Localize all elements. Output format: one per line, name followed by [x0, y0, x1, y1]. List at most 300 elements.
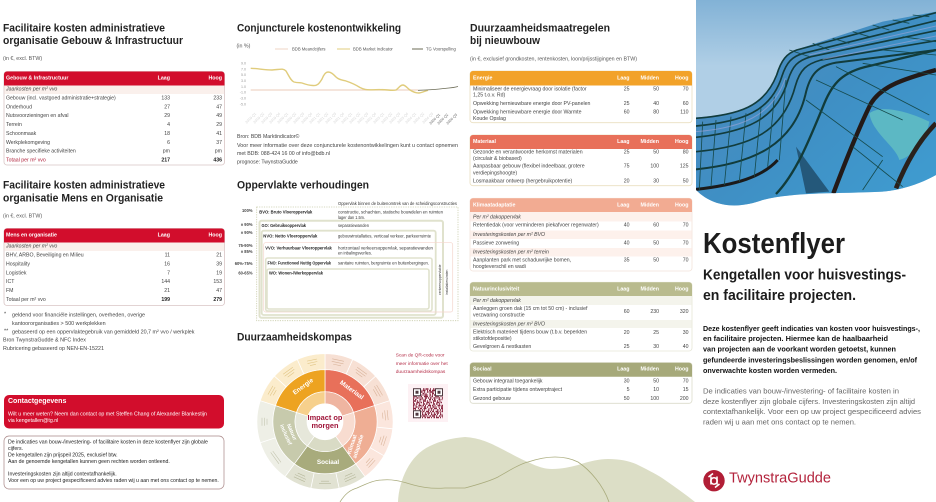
table header: Hoog [675, 202, 688, 208]
table: Klimaatadaptatie: 70 [683, 223, 689, 229]
intro text: onverwachte kosten worden vermeden. [703, 366, 837, 375]
table: Mens en organisatie: 11 [165, 252, 170, 258]
table header: Laag [617, 139, 630, 145]
heading: facility costs people: organisatie Mens en Organisatie [3, 192, 163, 204]
table: Materiaal: 125 [680, 164, 689, 170]
table: Gebouw & Infrastructuur: Jaarkosten per m² vvo [5, 87, 57, 93]
table header: Laag [158, 76, 170, 82]
percentages: 60-65% [238, 270, 253, 276]
table header: Mens en organisatie [6, 232, 57, 238]
table: Energie: Opwekking hernieuwbare energie door Warmte [473, 110, 582, 116]
table: Gebouw & Infrastructuur: Werkplekomgeving [6, 140, 50, 146]
unit note: (in €, exclusief grondkosten, rentenkosten, loon/prijsstijgingen en BTW) [470, 56, 637, 62]
heading: facility costs building [3, 22, 183, 47]
table: Energie: Opwekking hernieuwbare energie door PV-panelen [473, 101, 590, 107]
compass centre text: morgen [311, 421, 339, 430]
table: Sociaal [470, 363, 692, 403]
table: Energie: 110 [680, 110, 689, 116]
table: Mens en organisatie: 19 [216, 270, 222, 276]
vertical labels: installatieruimten [445, 269, 449, 295]
table: Gebouw & Infrastructuur [4, 72, 224, 165]
table: Klimaatadaptatie: 50 [653, 240, 659, 246]
table: Sociaal: Gebouw integraal toegankelijk [473, 378, 543, 384]
explanatory text: contextafhankelijk. Voor een op uw project gespecificeerd advies [703, 407, 921, 416]
table: Materiaal: (circulair & biobased) [473, 156, 522, 162]
footnotes: ** [4, 328, 9, 334]
heading: sustainability measures [470, 22, 610, 47]
table: Natuurinclusiviteit: verzwaring constructie [473, 312, 525, 318]
table: Sociaal: Gezond gebouw [473, 396, 511, 402]
area descriptions: Oppervlak binnen de buitenomtrek van de scheidingsconstructies [338, 201, 457, 206]
y axis: 9.0 [241, 62, 246, 66]
logo: TwynstraGudde [703, 470, 831, 491]
table header: Laag [617, 75, 630, 81]
x axis labels: 2019 Q3 [261, 112, 273, 124]
segment labels: Energie [292, 377, 315, 396]
series: BDB Meandcijfers [251, 89, 418, 91]
table: Klimaatadaptatie: 50 [653, 258, 659, 264]
decorative green background shape [398, 437, 695, 502]
panel: disclaimer: cijfers. [8, 446, 23, 452]
table header: Laag [617, 367, 630, 373]
percentages: ± 90% [241, 222, 253, 227]
table: Gebouw & Infrastructuur: Totaal per m² vvo [6, 158, 46, 164]
x axis labels: 2022 Q2 [349, 112, 361, 124]
table: Materiaal: Losmaakbaar ontwerp (hergebruikpotentie) [473, 179, 572, 185]
x axis labels: 2020 Q1 [277, 112, 289, 124]
table header [470, 71, 692, 86]
table header: Hoog [675, 286, 688, 292]
segment labels: inclusief [278, 424, 293, 446]
percentages: ± 85% [241, 249, 253, 254]
table: Klimaatadaptatie: Retentiedak (voor verminderen piekafvoer regenwater) [473, 223, 599, 229]
area descriptions: separatiewanden [338, 223, 370, 228]
x axis labels: 2026 Q3 [446, 113, 458, 125]
compass centre text [308, 413, 343, 430]
table: Natuurinclusiviteit: 40 [683, 344, 689, 350]
y axis: 5.0 [241, 73, 246, 77]
y axis: -3.0 [240, 96, 246, 100]
table: Natuurinclusiviteit [470, 282, 692, 351]
contact heading: Contactgegevens [8, 398, 66, 405]
area labels: VVO: Verhuurbaar Vloeroppervlak [265, 246, 332, 250]
table: Energie: 70 [683, 86, 689, 92]
table: Natuurinclusiviteit: Investeringskosten per m² BVO [473, 321, 545, 327]
panel: disclaimer: Investeringskosten zijn altijd contextafhankelijk. [8, 471, 117, 477]
area descriptions: sanitaire ruimten, bergruimte en buitenbergingen. [338, 260, 429, 266]
table: Natuurinclusiviteit: 320 [680, 309, 689, 315]
table: Materiaal: 80 [683, 150, 689, 156]
table: Klimaatadaptatie: hoogteverschil en wadi [473, 264, 526, 270]
segment: Energie [260, 354, 325, 416]
heading: sustainability measures: bij nieuwbouw [470, 35, 541, 47]
table header: Natuurinclusiviteit [473, 286, 519, 292]
table header: Midden [640, 202, 659, 208]
segment labels: Natuur [285, 423, 298, 442]
area descriptions: en inbalingsverlies. [338, 250, 372, 256]
area labels: WO: Wonen-/Werkoppervlak [269, 270, 324, 276]
table: Mens en organisatie: 199 [161, 297, 170, 303]
table: Materiaal: Aanpasbaar gebouw (flexibel indeelbaar, grotere [473, 164, 585, 170]
table: Gebouw & Infrastructuur: Gebouw (incl. vastgoed administratie+strategie) [6, 96, 116, 102]
table header: Sociaal [473, 367, 492, 373]
table: Mens en organisatie: Hospitality [6, 262, 30, 268]
table header [470, 363, 692, 377]
chart source text: prognose: TwynstraGudde [237, 160, 298, 166]
table: Mens en organisatie: 47 [216, 288, 222, 294]
table: Gebouw & Infrastructuur: 29 [216, 122, 222, 128]
x axis labels: 2026 Q2 [437, 113, 449, 125]
area labels [259, 210, 332, 276]
x axis labels: 2023 Q2 [381, 112, 393, 124]
main title: Kostenflyer [703, 228, 845, 260]
diagram: floor area ratios [235, 201, 458, 321]
segment labels: Materiaal [338, 379, 365, 401]
table header: Laag [617, 202, 630, 208]
x axis labels: 2019 Q4 [269, 112, 281, 124]
percentages: 60%-75% [235, 261, 253, 266]
line chart: cost development [240, 46, 458, 125]
table header: Hoog [675, 75, 688, 81]
footnotes: gebaseerd op een oppervlaktegebruik van gemiddeld 20,7 m² vvo / werkplek [12, 329, 195, 335]
segment labels [278, 377, 366, 466]
x axis labels: 2020 Q3 [293, 112, 305, 124]
table header: Materiaal [473, 139, 496, 145]
footnotes: kantoororganisaties > 500 werkplekken [12, 321, 106, 327]
area descriptions: horizontaal verkeersoppervlak, separatiewanden [338, 246, 434, 250]
x axis labels: 2023 Q1 [373, 112, 385, 124]
QR caption: meer informatie over het [396, 361, 448, 367]
chart source text: Bron: BDB Marktindicator© [237, 133, 300, 140]
table: Gebouw & Infrastructuur: Branche specifieke activiteiten [6, 149, 76, 155]
segment: Natuurinclusiviteit [257, 401, 314, 477]
table: Mens en organisatie: 16 [164, 262, 170, 268]
area descriptions: gebouwinstallaties, verticaal verkeer, parkeerruimte [338, 234, 432, 238]
x axis labels: 2023 Q3 [389, 112, 401, 124]
table: Gebouw & Infrastructuur: 436 [213, 158, 222, 164]
explanatory text: De indicaties van bouw-/investering- of facilitaire kosten in [703, 386, 899, 396]
panel: contact details [4, 395, 224, 428]
table: Gebouw & Infrastructuur: pm [215, 149, 222, 155]
intro text: en facilitaire projecten. Hiermee kan de haalbaarheid [703, 334, 888, 343]
table header: Midden [640, 286, 659, 292]
table: Gebouw & Infrastructuur: 47 [216, 104, 222, 110]
segment: Sociaal [285, 436, 365, 490]
logo wordmark: TwynstraGudde [729, 471, 831, 487]
chart source text [237, 133, 458, 166]
table: Klimaatadaptatie: 40 [624, 240, 630, 246]
panel: disclaimer: De kengetallen zijn prijspeil 2025, exclusief btw. [8, 452, 118, 458]
table: Energie: 60 [624, 110, 630, 116]
table header: Hoog [675, 139, 688, 145]
subtitle: en facilitaire projecten. [703, 287, 856, 304]
chart: sustainability compass wheel [257, 354, 393, 490]
table: Gebouw & Infrastructuur: Nutsvoorzieningen en afval [6, 113, 69, 119]
table: Natuurinclusiviteit: Gevelgroen & nestkasten [473, 344, 531, 350]
area descriptions: constructie, schachten, statische bouwdelen en ruimten [338, 210, 444, 214]
heading: facility costs people: Facilitaire kosten administratieve [3, 180, 165, 192]
unit note: (in %) [236, 44, 251, 50]
heading: facility costs people [3, 180, 165, 204]
contact text [8, 412, 207, 424]
chart legend: BDB Meandcijfers [292, 46, 326, 52]
table header: Midden [640, 75, 659, 81]
table header [4, 72, 224, 86]
explanatory text: raden wij u aan met ons contact op te nemen. [703, 418, 856, 426]
table header: Midden [640, 367, 659, 373]
photo: curved glass building facade [696, 0, 936, 206]
table: Klimaatadaptatie: 40 [624, 223, 630, 229]
panel: disclaimer: De indicaties van bouw-/investering- of facilitaire kosten in deze kostenflyer zijn globale [8, 439, 208, 445]
series: TG Voorspelling [418, 86, 458, 90]
table: Sociaal: 50 [624, 396, 630, 402]
footnotes: * [4, 312, 7, 318]
table: Mens en organisatie: ICT [6, 279, 15, 285]
heading: facility costs building: Facilitaire kosten administratieve [3, 22, 165, 34]
table: Energie [470, 71, 692, 123]
percentages: 75-90% [238, 243, 253, 248]
table header [470, 198, 692, 212]
table: Gebouw & Infrastructuur: 29 [164, 113, 170, 119]
table: Klimaatadaptatie: Per m² dakoppervlak [473, 214, 521, 220]
panel: disclaimer: Aan de genoemde kengetallen kunnen geen rechten worden ontleend. [8, 459, 170, 465]
series: BDB Market Indicator [251, 68, 428, 93]
table: Mens en organisatie: Totaal per m² vvo [6, 297, 46, 303]
table: Natuurinclusiviteit: 30 [683, 330, 689, 336]
table header [470, 135, 692, 149]
area descriptions: lager dan 1.5m. [338, 215, 365, 220]
table: Mens en organisatie: 21 [164, 288, 170, 294]
subtitle: Kengetallen voor huisvestings- [703, 266, 906, 284]
table header: Hoog [208, 232, 222, 238]
x axis labels: 2024 Q2 [413, 112, 425, 124]
x axis labels: 2022 Q4 [365, 112, 377, 124]
table: Sociaal: 30 [624, 378, 630, 384]
table: Mens en organisatie: 144 [161, 279, 170, 285]
table: Gebouw & Infrastructuur: Terrein [6, 122, 22, 128]
x axis labels: 2021 Q4 [333, 112, 345, 124]
x axis labels: 2026 Q1 [429, 113, 441, 125]
table header: Klimaatadaptatie [473, 202, 515, 208]
table: Klimaatadaptatie: 60 [653, 223, 659, 229]
table: Materiaal: 20 [624, 179, 630, 185]
table: Energie: 25 [624, 101, 630, 107]
table: Materiaal: 30 [653, 179, 659, 185]
table: Natuurinclusiviteit: Per m² dakoppervlak [473, 298, 521, 304]
x axis labels: 2020 Q4 [301, 112, 313, 124]
chart legend [275, 46, 456, 52]
table: Sociaal: 70 [683, 378, 689, 384]
segment labels: Klimaat [347, 434, 359, 455]
QR caption: Scan de QR-code voor [396, 352, 445, 358]
footnotes: Rubricering gebaseerd op NEN-EN-15221 [3, 346, 104, 352]
table: Materiaal: 25 [624, 150, 630, 156]
table: Gebouw & Infrastructuur: 233 [213, 96, 222, 102]
table: Energie: 80 [653, 110, 659, 116]
heading: facility costs building: organisatie Gebouw & Infrastructuur [3, 35, 183, 47]
panel: disclaimer [4, 436, 224, 489]
table: Mens en organisatie [4, 228, 224, 306]
segment: Materiaal [325, 354, 390, 416]
percentages [235, 208, 253, 276]
contact text: via kengetallen@tg.nl [8, 418, 58, 424]
table header: Energie [473, 75, 492, 81]
table: Natuurinclusiviteit: stikstofdepositie) [473, 336, 512, 342]
segment labels: adaptatie [352, 434, 366, 459]
table: Mens en organisatie: BHV, ARBO, Beveiliging en Milieu [6, 252, 84, 258]
compass centre text: Impact op [308, 413, 343, 422]
footnotes: Bron TwynstraGudde & NFC Index [3, 338, 86, 344]
segment: Klimaatadaptatie [336, 401, 393, 477]
area labels: BVO: Bruto Vloeroppervlak [259, 210, 313, 214]
table: Sociaal: 5 [627, 387, 630, 393]
table: Gebouw & Infrastructuur: 27 [164, 104, 170, 110]
table: Gebouw & Infrastructuur: Onderhoud [6, 104, 32, 110]
table: Materiaal: 50 [683, 179, 689, 185]
explanatory text: deze kostenflyer zijn globale cijfers. Investeringskosten zijn altijd [703, 397, 915, 406]
logo mark [703, 470, 725, 491]
table: Energie: 50 [653, 86, 659, 92]
contact text: Wilt u meer weten? Neem dan contact op met Steffen Chang of Alexander Blankestijn [8, 412, 207, 418]
table: Gebouw & Infrastructuur: 133 [161, 96, 170, 102]
table: Natuurinclusiviteit: 60 [624, 309, 630, 315]
y axis: 3.0 [241, 79, 246, 83]
y axis: -5.0 [240, 102, 246, 106]
table: Energie: Koude Opslag [473, 116, 506, 122]
table: Energie: 60 [683, 101, 689, 107]
x axis labels: 2019 Q1 [245, 112, 257, 124]
table: Materiaal [470, 135, 692, 186]
table: Mens en organisatie: Logistiek [6, 270, 27, 276]
x axis labels: 2024 Q1 [405, 112, 417, 124]
table: Gebouw & Infrastructuur: 18 [164, 131, 170, 137]
table: Gebouw & Infrastructuur: 49 [216, 113, 222, 119]
table header: Midden [640, 139, 659, 145]
x axis labels [245, 112, 458, 125]
table: Sociaal: 15 [683, 387, 689, 393]
y axis [240, 62, 246, 106]
vertical labels [438, 264, 449, 295]
table: Klimaatadaptatie: Aanplanten park met schaduwrijke bomen, [473, 258, 571, 264]
table: Mens en organisatie: Jaarkosten per m² vvo [5, 244, 57, 250]
table header: Laag [617, 286, 630, 292]
chart legend: TG Voorspelling [426, 46, 456, 52]
intro text: gefundeerde investeringsbeslissingen worden genomen, en/of [703, 356, 918, 364]
x axis labels: 2021 Q1 [309, 112, 321, 124]
QR code [408, 384, 448, 422]
table: Mens en organisatie: FM [6, 288, 14, 294]
table header: Hoog [675, 367, 688, 373]
panel: disclaimer: Voor een op uw project gespecificeerd advies raden wij u aan met ons contact op te nemen. [8, 478, 219, 484]
table header: Gebouw & Infrastructuur [6, 76, 68, 82]
table: Klimaatadaptatie: 70 [683, 258, 689, 264]
area descriptions [338, 201, 457, 266]
x axis labels: 2023 Q4 [397, 112, 409, 124]
table: Natuurinclusiviteit: Aanleggen groen dak (15 cm tot 50 cm) - inclusief [473, 306, 588, 312]
table: Sociaal: 50 [653, 378, 659, 384]
area labels: GO: Gebruiksoppervlak [262, 223, 307, 228]
table: Natuurinclusiviteit: 25 [624, 344, 630, 350]
heading: floor area ratios: Oppervlakte verhoudingen [237, 180, 369, 192]
table: Materiaal: Gezonde en verantwoorde herkomst materialen [473, 150, 583, 156]
table: Materiaal: verdiepingshoogte) [473, 170, 517, 176]
QR caption [396, 352, 448, 375]
x axis labels: 2021 Q3 [325, 112, 337, 124]
table: Materiaal: 75 [624, 164, 630, 170]
chart source text: met BDB: 088-424 16 00 of info@bdb.nl [237, 151, 330, 157]
subtitle [703, 266, 906, 304]
table: Sociaal: 100 [650, 396, 659, 402]
x axis labels: 2024 Q3 [422, 112, 434, 124]
table: Gebouw & Infrastructuur: 6 [167, 140, 170, 146]
table: Klimaatadaptatie: 70 [683, 240, 689, 246]
table: Sociaal: 10 [653, 387, 659, 393]
unit note: (in €, excl. BTW) [3, 213, 42, 219]
y axis: -1.0 [240, 91, 246, 95]
table: Materiaal: 100 [650, 164, 659, 170]
table: Klimaatadaptatie: Investeringskosten per m² terrein [473, 249, 549, 255]
table: Mens en organisatie: 39 [216, 262, 222, 268]
table: Klimaatadaptatie [470, 198, 692, 271]
table: Natuurinclusiviteit: 230 [650, 309, 659, 315]
table: Gebouw & Infrastructuur: 37 [216, 140, 222, 146]
table header [470, 282, 692, 296]
table: Gebouw & Infrastructuur: Schoonmaak [6, 131, 37, 137]
heading: sustainability compass: Duurzaamheidskompas [237, 331, 352, 343]
heading: sustainability measures: Duurzaamheidsmaatregelen [470, 22, 610, 34]
table: Energie: 25 [624, 86, 630, 92]
table: Mens en organisatie: 7 [167, 270, 170, 276]
table header: Laag [158, 232, 170, 238]
percentages: ± 90% [241, 230, 253, 235]
table: Natuurinclusiviteit: 20 [624, 330, 630, 336]
table: Natuurinclusiviteit: 30 [653, 344, 659, 350]
x axis labels: 2021 Q2 [317, 112, 329, 124]
intro text [703, 324, 920, 375]
intro text: van projecten aan de voorkant worden getoetst, kunnen [703, 344, 896, 354]
table: Mens en organisatie: 21 [216, 252, 222, 258]
table: Natuurinclusiviteit: Elektrisch materieel tijdens bouw (t.b.v. beperkten [473, 329, 587, 335]
area labels: NVO: Netto Vloeroppervlak [263, 234, 318, 238]
segment labels: Sociaal [317, 459, 339, 466]
table: Gebouw & Infrastructuur: 217 [161, 158, 170, 164]
vertical labels: verkeersoppervlakte [438, 264, 442, 295]
table: Gebouw & Infrastructuur: 41 [216, 131, 222, 137]
explanatory text [703, 386, 921, 426]
table: Klimaatadaptatie: 35 [624, 258, 630, 264]
x axis labels: 2020 Q2 [285, 112, 297, 124]
table header: Hoog [208, 76, 222, 82]
table: Materiaal: 50 [653, 150, 659, 156]
table: Natuurinclusiviteit: 25 [653, 330, 659, 336]
table: Energie: 1,25 t.o.v. Rd) [473, 92, 505, 98]
x axis labels: 2022 Q3 [357, 112, 369, 124]
y axis: 1.0 [241, 85, 246, 89]
decorative curved line [340, 457, 609, 502]
table: Klimaatadaptatie: Investeringskosten per m² BVO [473, 232, 545, 238]
area labels: FNO: Functioneel Nuttig Oppervlak [268, 260, 332, 266]
x axis labels: 2019 Q2 [253, 112, 265, 124]
table: Mens en organisatie: 153 [213, 279, 222, 285]
table header [4, 228, 224, 242]
table: Sociaal: 200 [680, 396, 689, 402]
QR caption: duurzaamheidskompas [396, 369, 446, 375]
unit note: (in €, excl. BTW) [3, 56, 42, 62]
table: Energie: Minimaliseer de energievraag door isolatie (factor [473, 86, 587, 92]
table: Sociaal: Extra participatie tijdens ontwerptraject [473, 387, 563, 393]
percentages: 100% [242, 208, 253, 213]
table: Mens en organisatie: 279 [213, 297, 222, 303]
